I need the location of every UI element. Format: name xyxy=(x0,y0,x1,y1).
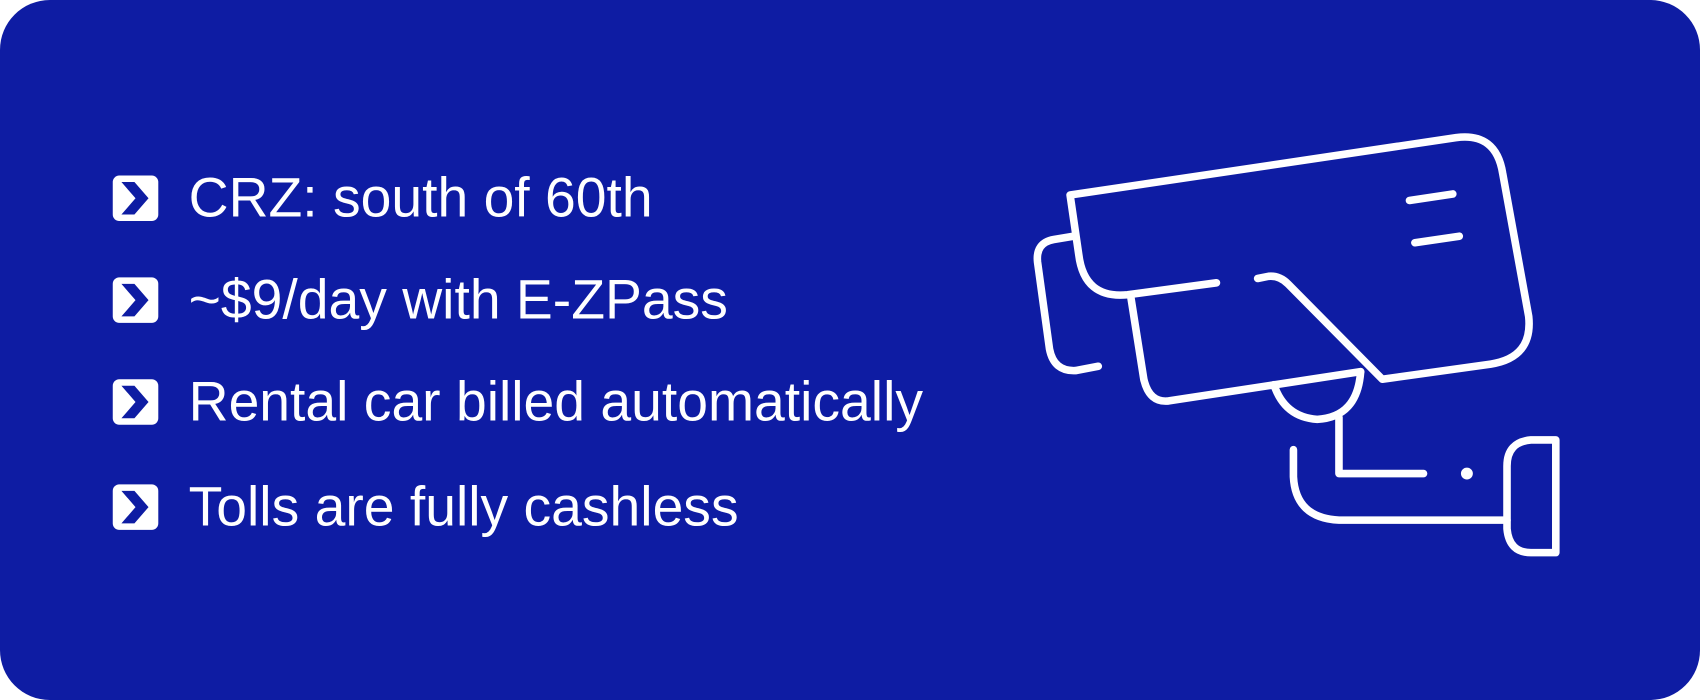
bullet item 4: Tolls are fully cashless xyxy=(189,476,739,538)
bullet list xyxy=(113,167,923,538)
bullet item 1: CRZ: south of 60th xyxy=(189,167,653,229)
bullet item 2: ~$9/day with E-ZPass xyxy=(189,269,728,331)
bullet item 3: Rental car billed automatically xyxy=(189,370,923,432)
icon: security camera xyxy=(1037,137,1556,553)
